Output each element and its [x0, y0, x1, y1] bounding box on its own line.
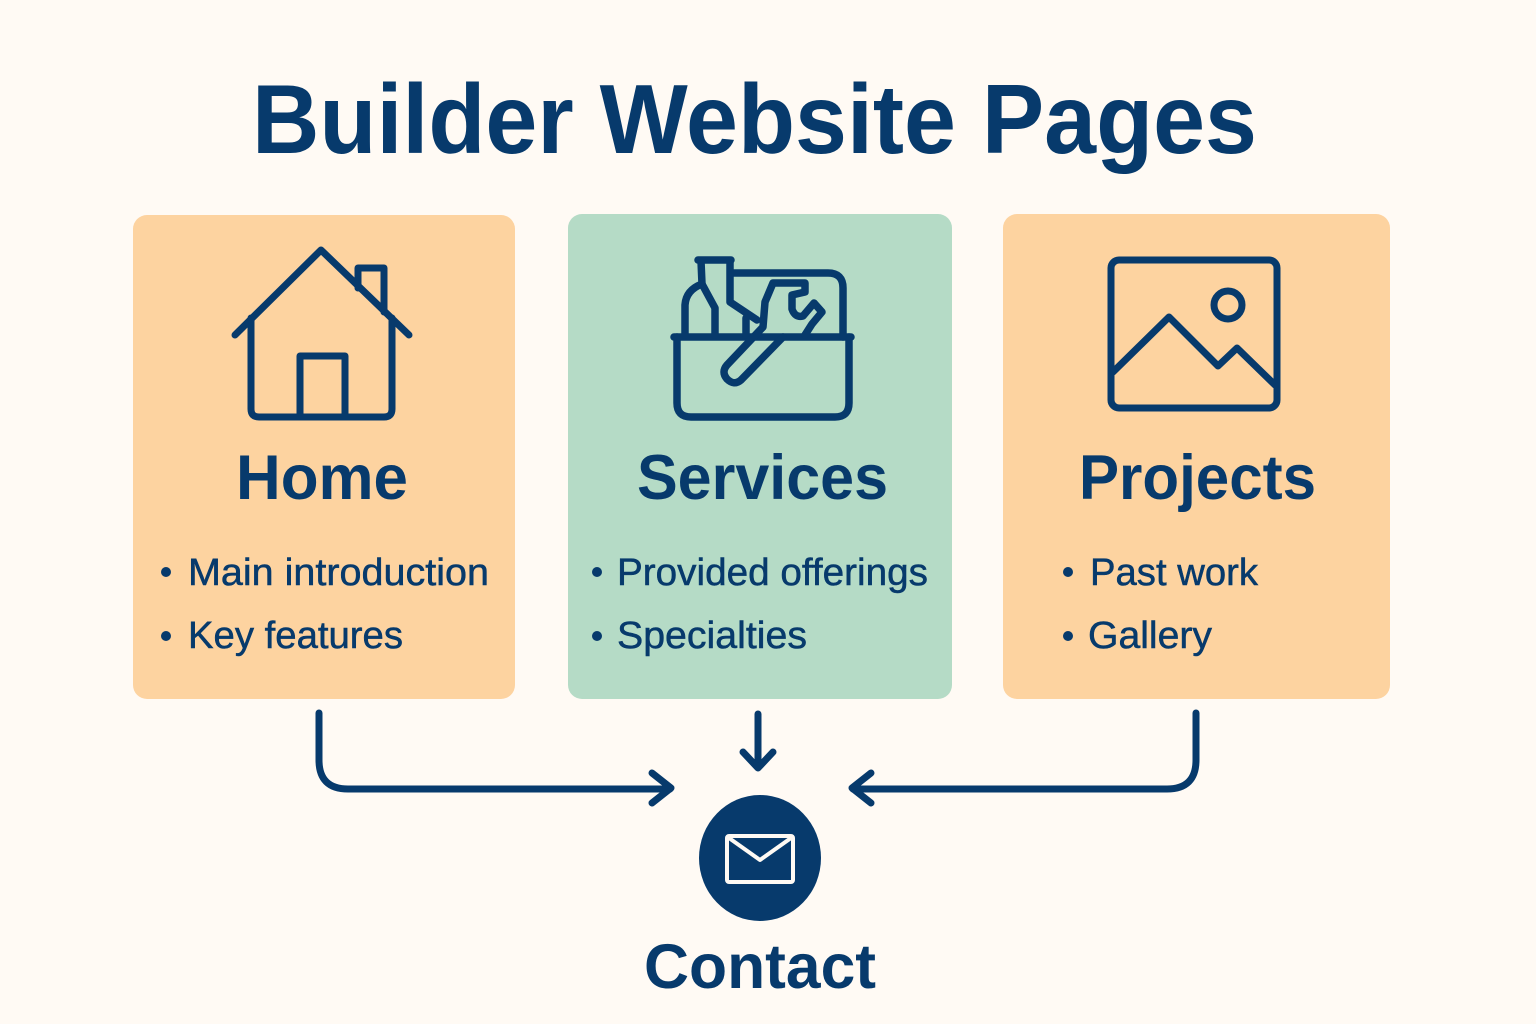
bullet list: projects: Past work: [1090, 552, 1259, 594]
icon: image: [1111, 260, 1277, 408]
bullet list: home: Main introduction: [188, 552, 489, 594]
bullet list: services: [592, 552, 928, 657]
icon: contact envelope: [699, 795, 821, 921]
arrow: projects to contact: [852, 713, 1196, 803]
heading: projects: Projects: [1079, 443, 1316, 513]
arrow: home to contact: [319, 713, 671, 803]
panel: home: [133, 215, 515, 699]
bullet list: services: Provided offerings: [617, 552, 928, 594]
heading: home: Home: [236, 443, 408, 513]
bullet list: services: Specialties: [617, 615, 807, 657]
bullet list: projects: Gallery: [1088, 615, 1212, 657]
arrow: services to contact: [743, 714, 773, 768]
icon: toolbox: [674, 260, 851, 417]
bullet list: projects: [1063, 552, 1259, 657]
label: contact: Contact: [644, 932, 876, 1002]
panel: services: [568, 214, 952, 699]
title: Builder Website Pages: [252, 64, 1257, 174]
heading: services: Services: [637, 443, 888, 513]
panel: projects: [1003, 214, 1390, 699]
bullet list: home: Key features: [188, 615, 403, 657]
bullet list: home: [161, 552, 489, 657]
icon: house: [235, 250, 409, 417]
